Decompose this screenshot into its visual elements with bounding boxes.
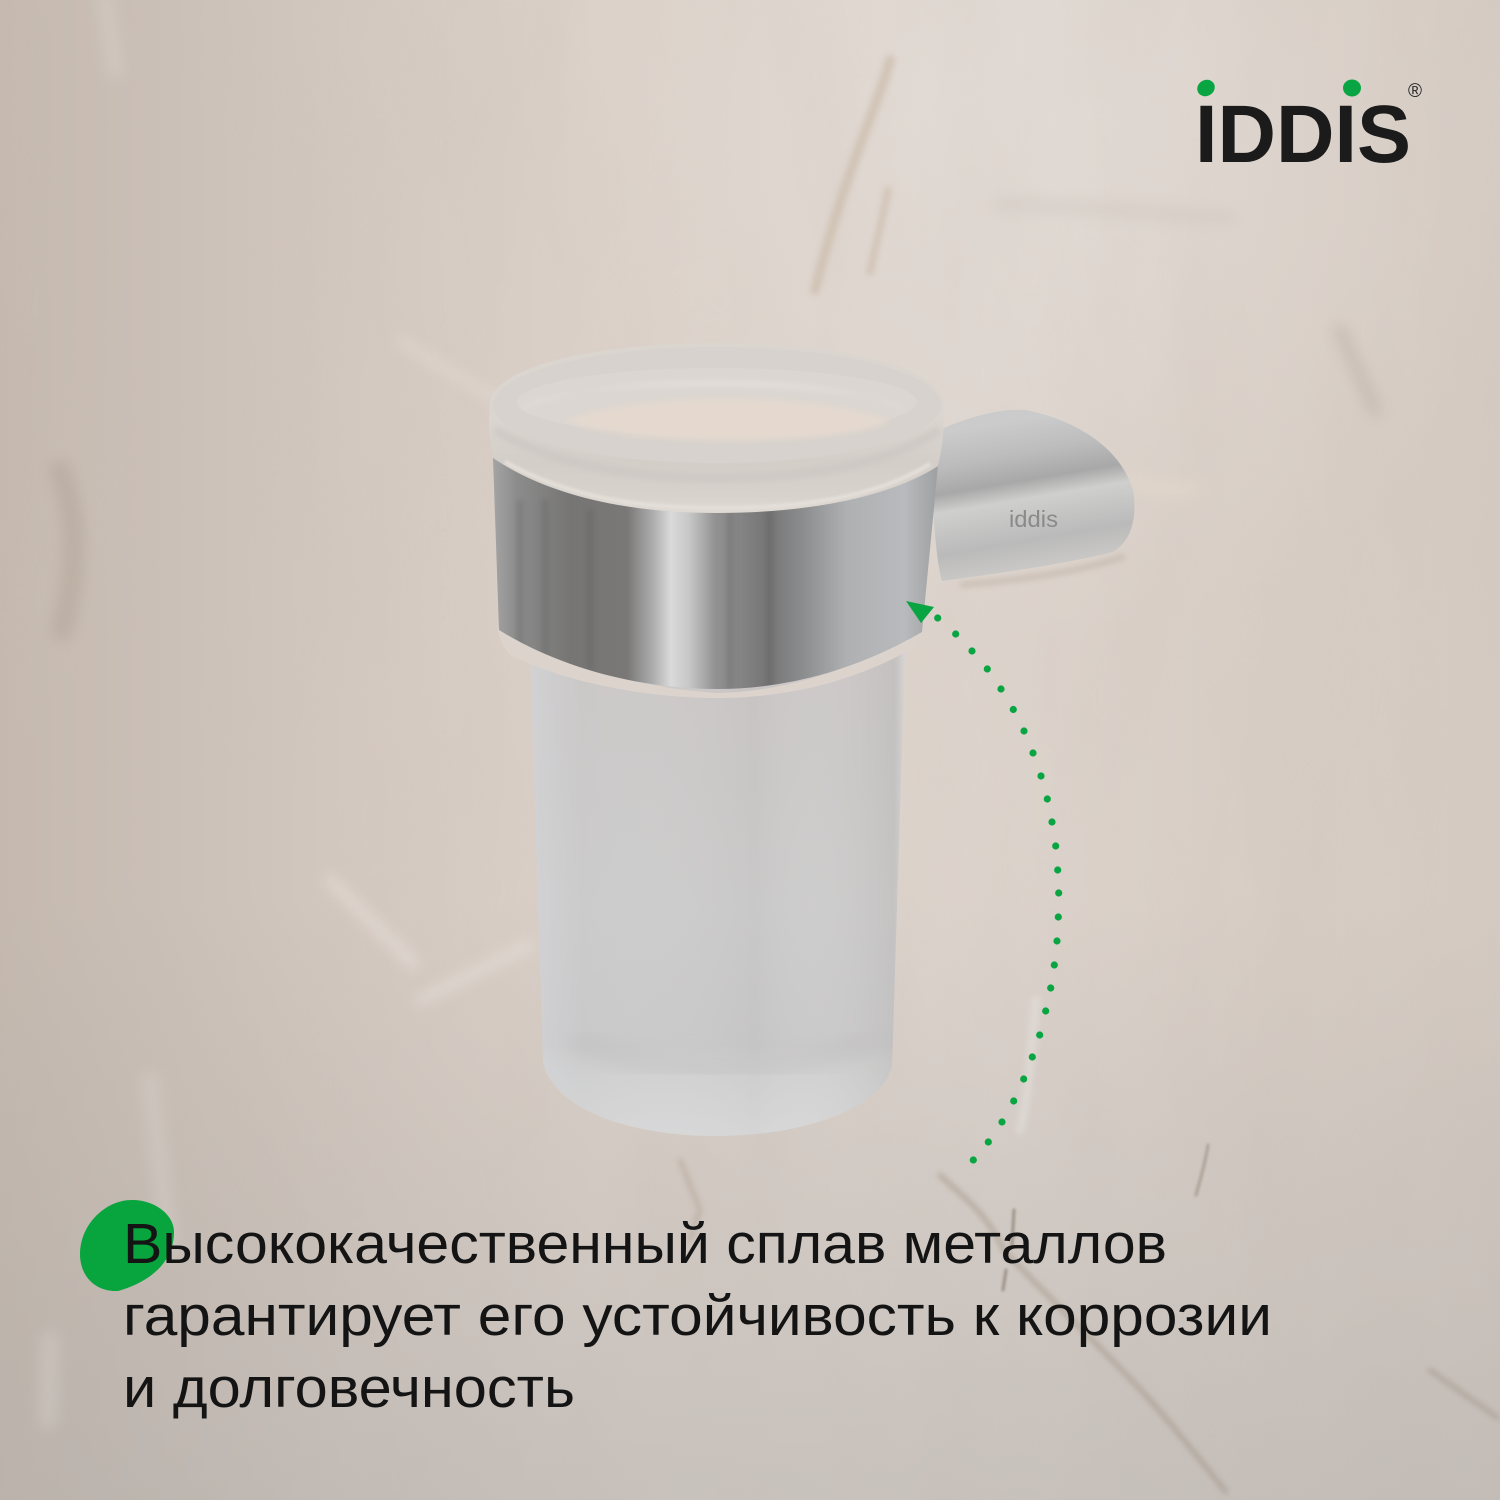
- wall bracket: [932, 410, 1134, 585]
- logo green dots: [1194, 77, 1361, 99]
- logo wordmark: IDDIS: [1195, 89, 1411, 180]
- arrow head: [906, 601, 934, 623]
- frosted glass rim: [489, 343, 944, 518]
- product: toothbrush glass holder: [489, 343, 1134, 1136]
- arrow dots: [934, 614, 1062, 1164]
- frosted glass body: [530, 650, 905, 1136]
- caption text: [123, 1212, 1272, 1420]
- caption text: Высококачественный сплав металлов: [123, 1212, 1167, 1276]
- registered mark: ®: [1408, 81, 1422, 102]
- engraved logo on bracket: iddis: [1009, 506, 1058, 532]
- caption text: и долговечность: [123, 1356, 575, 1420]
- frosted lower collar: [497, 625, 922, 698]
- caption text: гарантирует его устойчивость к коррозии: [123, 1284, 1272, 1348]
- green blob accent: [80, 1200, 174, 1291]
- brushed steel band: [493, 458, 938, 690]
- logo: iddis: [1194, 77, 1422, 180]
- arrow: dotted curved green arrow: [906, 601, 1062, 1164]
